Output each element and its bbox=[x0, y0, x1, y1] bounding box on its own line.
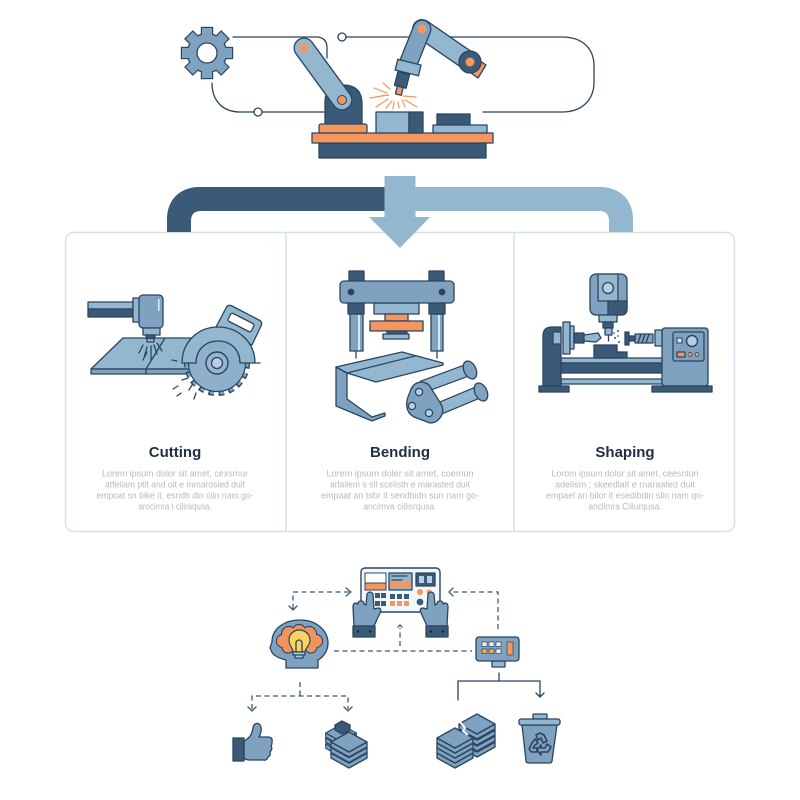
flow arrows: dark left branch bbox=[167, 187, 386, 232]
icon: CNC lathe bbox=[539, 274, 712, 392]
text block: bending: Lorem ipsum doler sit amet, coemun bbox=[326, 468, 474, 478]
text block: bending: empaat an bibr it sendbidn sun nam go- bbox=[321, 490, 479, 500]
hero: robotic welding cell bbox=[182, 24, 594, 158]
solid connectors bbox=[458, 673, 544, 700]
text block: cutting: arocimra t ciliraqusa. bbox=[138, 502, 212, 512]
icon: gear bbox=[182, 28, 232, 78]
icon: monitor bbox=[476, 637, 519, 667]
icon: thumbs up bbox=[233, 723, 272, 761]
icon: laser cutter and circular saw bbox=[88, 295, 262, 399]
flow arrows: light right branch bbox=[414, 187, 633, 232]
text block: bending: arlailem s sll scelisth e marasted duit bbox=[330, 480, 470, 490]
text block: shaping: Lorom ipsum dolor sit amet, ceesntun bbox=[552, 468, 698, 478]
text block: cutting bbox=[96, 468, 254, 512]
branch arrow stubs bbox=[167, 226, 633, 232]
panel: cutting bbox=[88, 295, 262, 512]
left robot arm bbox=[300, 44, 367, 133]
text block: shaping: anclimra Ciilurqusa. bbox=[588, 502, 662, 512]
left hand bbox=[353, 592, 381, 637]
robot table bbox=[312, 133, 493, 158]
panel: three process cards bbox=[66, 232, 734, 532]
dashed connectors bbox=[248, 588, 498, 711]
right hand bbox=[420, 592, 448, 637]
central down arrow bbox=[369, 176, 430, 248]
icon: recycling bin bbox=[519, 714, 560, 763]
heading: shaping: Shaping bbox=[595, 444, 655, 461]
welding sparks bbox=[370, 83, 417, 109]
circuit loop line bbox=[212, 33, 594, 116]
text block: bending: ancimva ciilisrqusa. bbox=[364, 502, 436, 512]
control flow diagram bbox=[233, 568, 560, 768]
icon: press brake, bent sheet and rollers bbox=[336, 271, 490, 423]
text block: shaping: adelism ; skeedlalt e rnaraated duit bbox=[555, 480, 695, 490]
icon: rejected parts stack bbox=[437, 714, 495, 768]
icon: head with brain and lightbulb bbox=[270, 620, 328, 668]
text block: cutting: Lorem ipsum dolor sit amet, cexsmur bbox=[102, 468, 248, 478]
icon: good parts stack bbox=[326, 721, 367, 768]
panel: bending bbox=[321, 271, 490, 512]
heading: bending: Bending bbox=[370, 444, 430, 461]
text block: cutting: empoat sn bike it, esndb din olin nam.go- bbox=[96, 490, 254, 500]
icon: control console with hands bbox=[353, 568, 448, 637]
right welding robot arm bbox=[393, 24, 486, 96]
text block: cutting: atfeliam ptit and oit e mmarosied duit bbox=[105, 480, 245, 490]
text block: shaping: empael an bilor it esedibdin slin nam qn- bbox=[546, 490, 704, 500]
heading: cutting: Cutting bbox=[149, 444, 201, 461]
workpiece blocks bbox=[376, 112, 487, 133]
text block: shaping bbox=[546, 468, 704, 512]
panel: shaping bbox=[539, 274, 712, 512]
text block: bending bbox=[321, 468, 479, 512]
